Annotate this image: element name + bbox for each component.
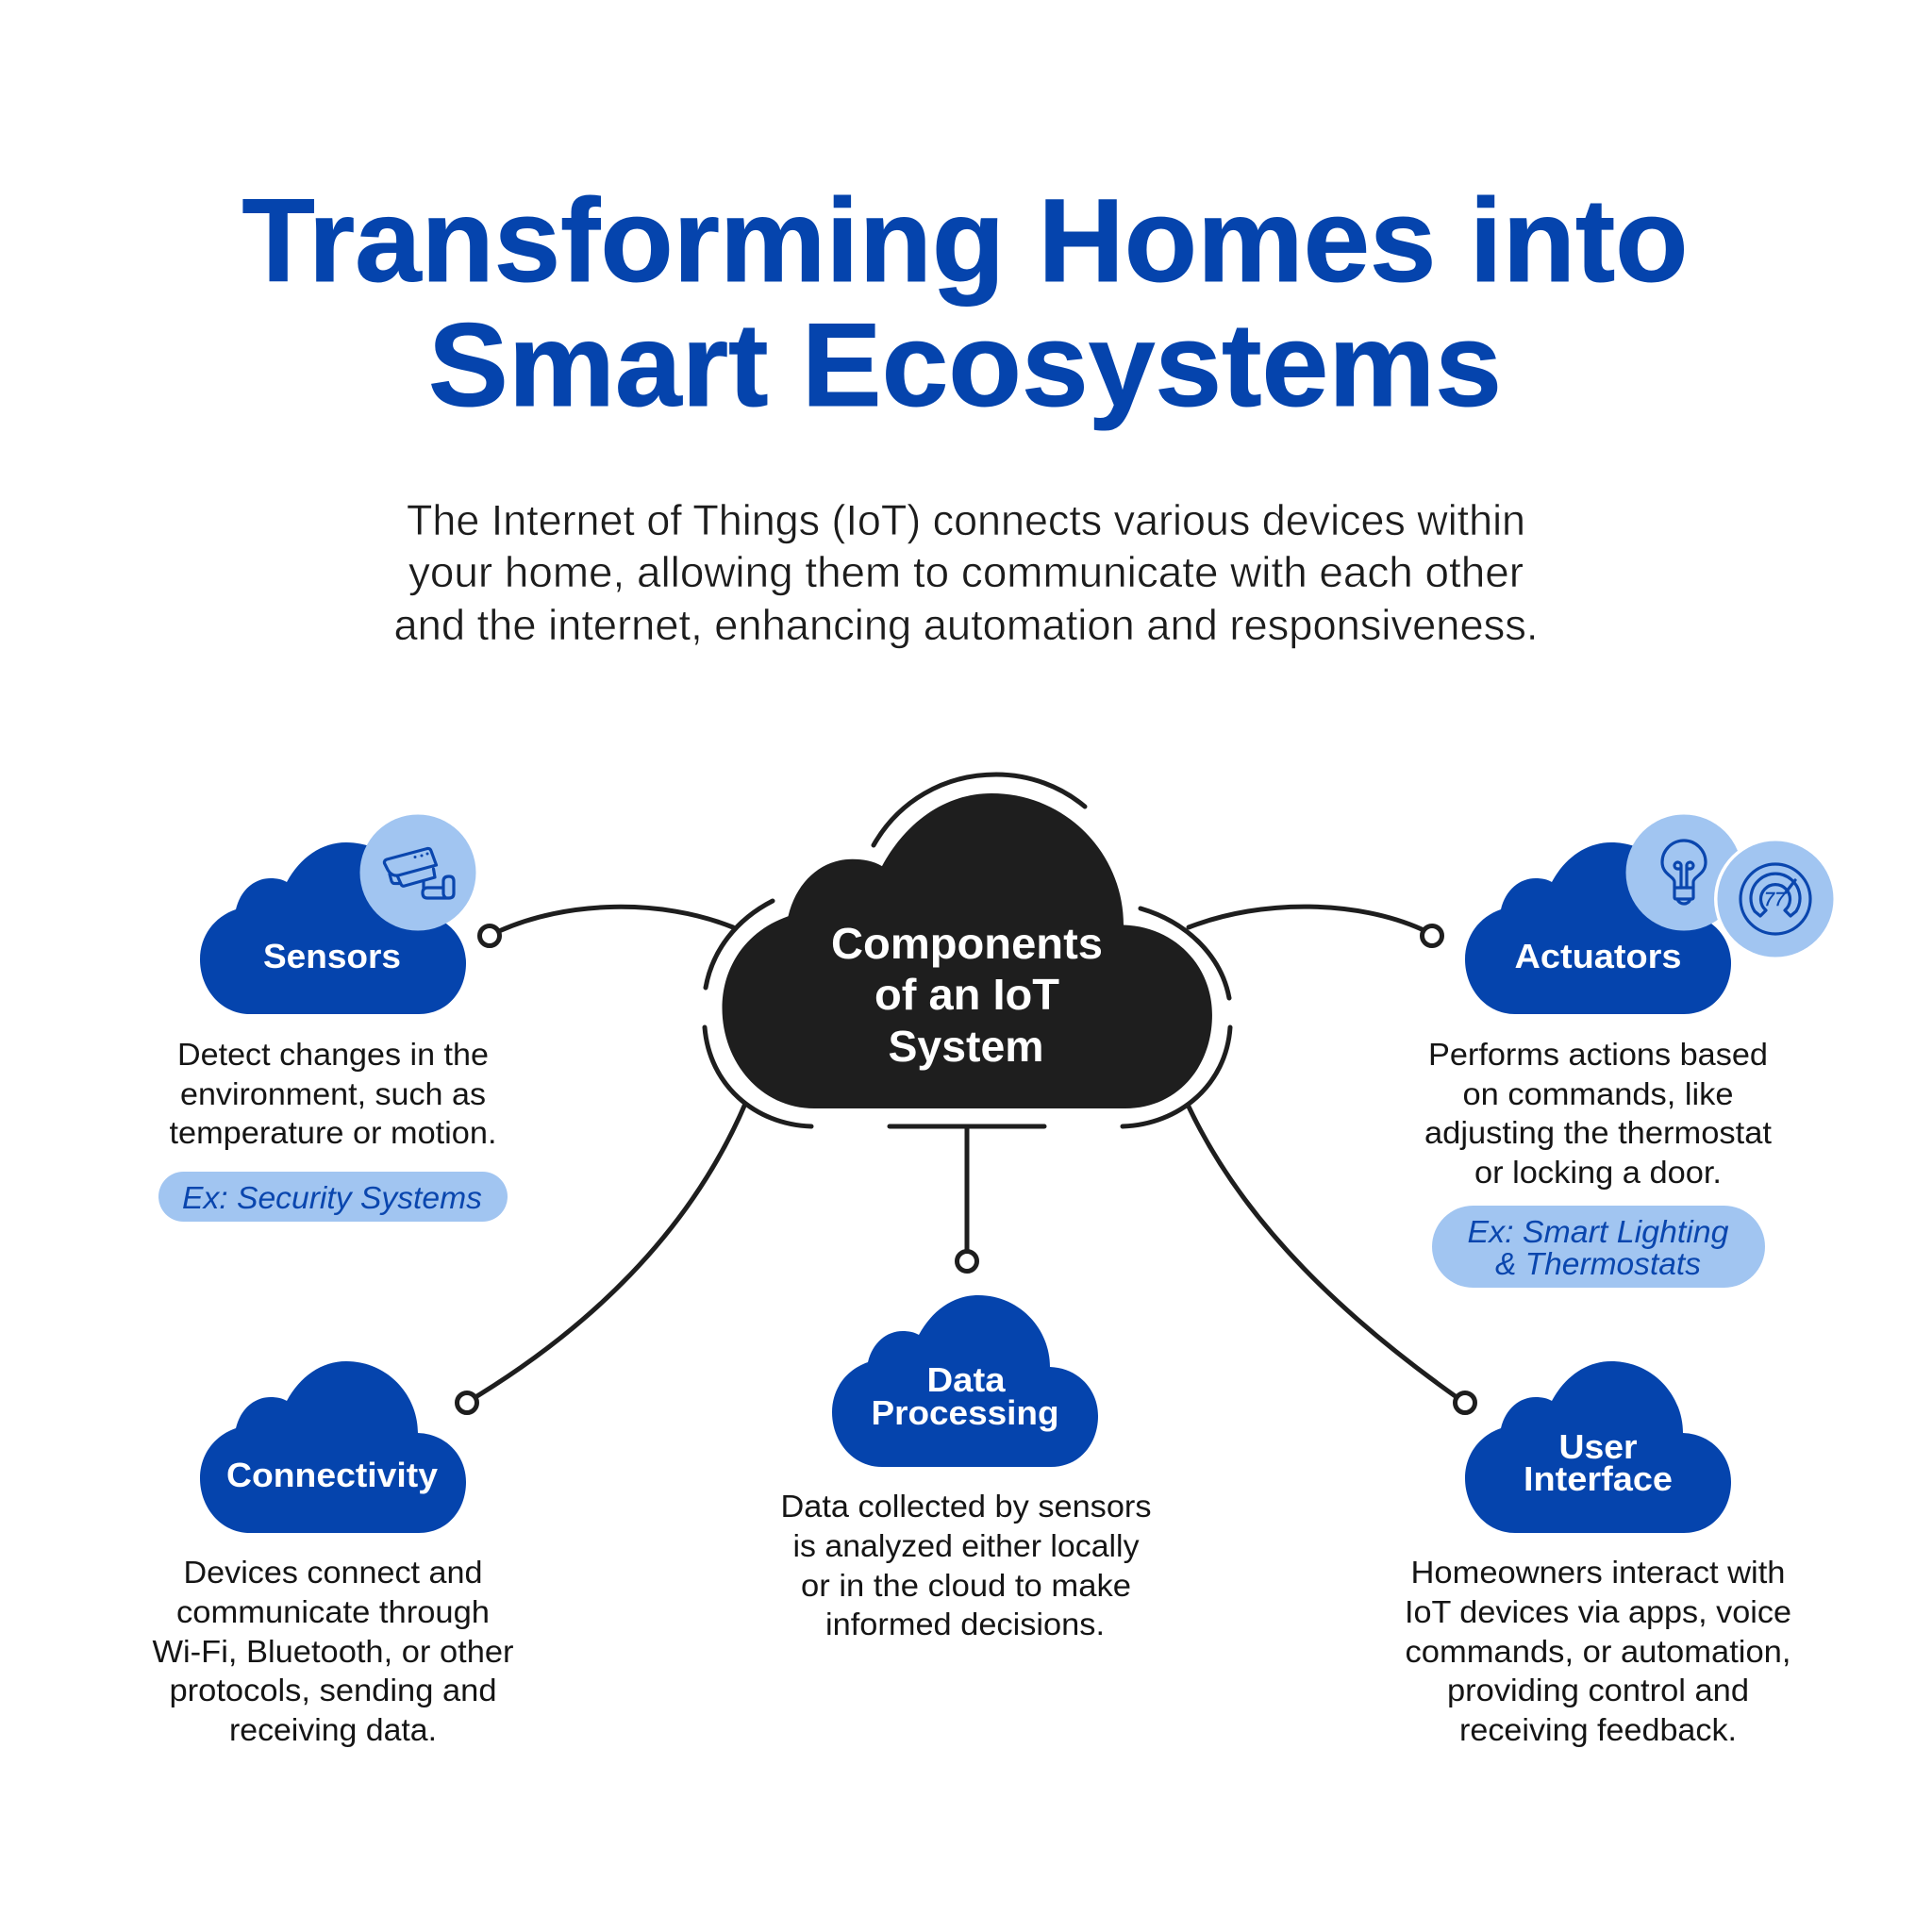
connectivity description: communicate through xyxy=(176,1594,490,1629)
intro paragraph xyxy=(394,496,1538,649)
intro paragraph: The Internet of Things (IoT) connects various devices within xyxy=(407,496,1525,544)
data processing label xyxy=(872,1360,1058,1432)
user interface description: receiving feedback. xyxy=(1459,1712,1737,1747)
actuators example pill: Ex: Smart Lighting xyxy=(1468,1214,1729,1249)
actuators description: Performs actions based xyxy=(1428,1037,1768,1072)
central cloud label: of an IoT xyxy=(874,970,1059,1019)
user interface description: providing control and xyxy=(1447,1673,1749,1707)
user interface label: Interface xyxy=(1524,1459,1673,1498)
title: Smart Ecosystems xyxy=(428,300,1502,431)
panel: sensors xyxy=(158,815,508,1222)
user interface description: Homeowners interact with xyxy=(1411,1555,1785,1590)
actuators description: or locking a door. xyxy=(1474,1155,1722,1190)
connectivity description xyxy=(153,1555,514,1747)
sensors description: temperature or motion. xyxy=(170,1115,496,1150)
data processing label: Processing xyxy=(872,1393,1058,1432)
connectivity description: protocols, sending and xyxy=(170,1673,496,1707)
user interface description: IoT devices via apps, voice xyxy=(1405,1594,1791,1629)
data processing description: Data collected by sensors xyxy=(781,1489,1151,1524)
data processing cloud xyxy=(832,1295,1098,1467)
actuators label: Actuators xyxy=(1515,937,1681,975)
icon: thermostat gauge: 77 xyxy=(1764,890,1786,910)
sensors description xyxy=(170,1037,496,1150)
actuators description: on commands, like xyxy=(1462,1076,1734,1111)
central cloud shape xyxy=(723,793,1212,1108)
panel: data processing xyxy=(781,1295,1151,1641)
actuators description: adjusting the thermostat xyxy=(1424,1115,1772,1150)
connector: sensors xyxy=(479,907,733,945)
actuators description xyxy=(1424,1037,1772,1190)
user interface label xyxy=(1524,1427,1673,1498)
data processing description: informed decisions. xyxy=(825,1607,1105,1641)
connector: connectivity xyxy=(457,1104,745,1413)
user interface description xyxy=(1405,1555,1791,1747)
sensors description: environment, such as xyxy=(180,1076,486,1111)
connector: actuators xyxy=(1189,907,1441,945)
actuators cloud xyxy=(1465,842,1731,1014)
intro paragraph: and the internet, enhancing automation and responsiveness. xyxy=(394,601,1538,649)
central cloud label: Components xyxy=(831,919,1103,968)
actuators example pill xyxy=(1432,1206,1765,1288)
connectivity description: Wi-Fi, Bluetooth, or other xyxy=(153,1634,514,1669)
connector: data processing xyxy=(957,1126,977,1272)
icon: security camera xyxy=(360,815,475,930)
sensors example pill xyxy=(158,1172,508,1222)
sensors cloud xyxy=(200,842,466,1014)
central cloud label: System xyxy=(889,1022,1043,1071)
data processing description: is analyzed either locally xyxy=(792,1528,1140,1563)
title xyxy=(242,175,1689,431)
user interface cloud xyxy=(1465,1361,1731,1533)
sensors example pill: Ex: Security Systems xyxy=(182,1180,482,1215)
panel: user interface xyxy=(1405,1361,1791,1747)
connector: user interface xyxy=(1189,1107,1475,1413)
sensors description: Detect changes in the xyxy=(177,1037,489,1072)
panel: connectivity xyxy=(153,1361,514,1747)
data processing label: Data xyxy=(926,1360,1007,1399)
connectivity cloud xyxy=(200,1361,466,1533)
central cloud label xyxy=(831,919,1103,1071)
data processing description: or in the cloud to make xyxy=(801,1568,1131,1603)
icon: thermostat gauge xyxy=(1714,838,1837,960)
central cloud: components of an IoT system xyxy=(705,774,1230,1126)
actuators example pill: & Thermostats xyxy=(1495,1246,1701,1281)
user interface description: commands, or automation, xyxy=(1406,1634,1790,1669)
sensors label: Sensors xyxy=(263,937,401,975)
user interface label: User xyxy=(1558,1427,1638,1466)
cloud outline arcs xyxy=(705,774,1230,1126)
connectivity description: receiving data. xyxy=(229,1712,437,1747)
intro paragraph: your home, allowing them to communicate with each other xyxy=(408,548,1524,596)
connectivity label: Connectivity xyxy=(226,1456,438,1494)
panel: actuators xyxy=(1424,815,1837,1288)
data processing description xyxy=(781,1489,1151,1641)
title: Transforming Homes into xyxy=(242,175,1689,307)
icon: light bulb xyxy=(1626,815,1741,930)
connectivity description: Devices connect and xyxy=(183,1555,483,1590)
